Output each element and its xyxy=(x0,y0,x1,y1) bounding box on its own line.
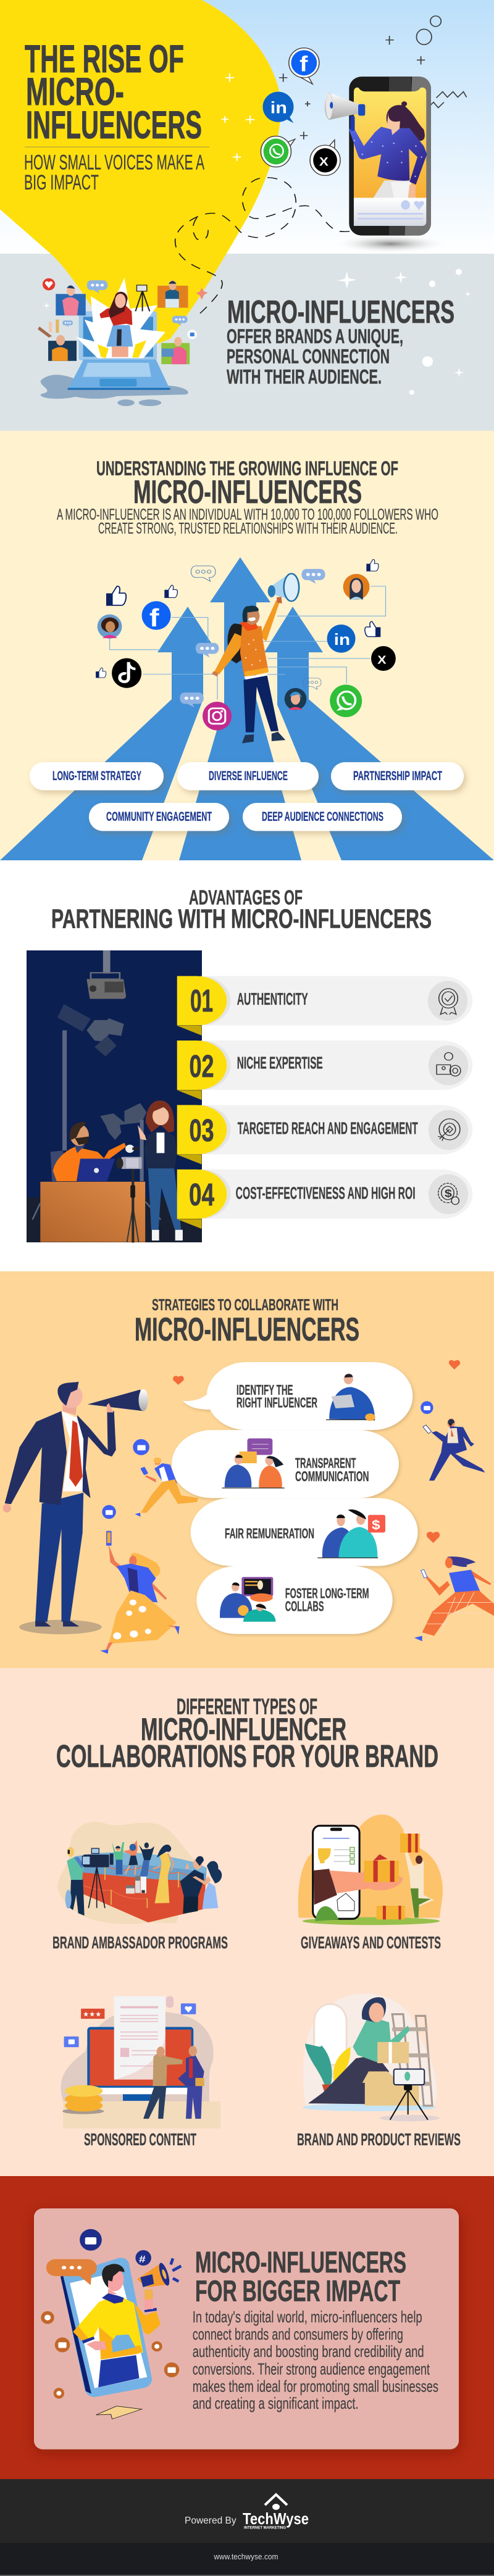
illustration: two people with payment xyxy=(317,1510,385,1558)
heading: micro-influencers offer: PERSONAL CONNECTION xyxy=(227,345,390,367)
icon: x bubble: X xyxy=(319,156,329,168)
illustration: influencer in phone: # xyxy=(139,2254,146,2265)
icon: x bubble xyxy=(310,140,340,175)
icon: expert xyxy=(437,1052,461,1076)
text: conclusion paragraph xyxy=(193,2308,438,2412)
pill: long-term strategy xyxy=(30,762,164,790)
panel: collaboration types xyxy=(0,1668,494,2176)
illustration: two people talking xyxy=(222,1439,285,1489)
icon: x: X xyxy=(377,654,387,667)
text: powered by: Powered By xyxy=(185,2516,237,2526)
pill: deep audience connections: DEEP AUDIENCE CONNECTIONS xyxy=(262,810,383,824)
icon: instagram xyxy=(203,702,232,730)
heading: bigger impact xyxy=(195,2246,406,2308)
pill: partnership impact xyxy=(331,762,464,790)
illustration: studio panel xyxy=(27,950,202,1242)
icon: phone with influencer xyxy=(324,77,447,253)
icon: facebook: f xyxy=(149,604,159,632)
heading: strategies: STRATEGIES TO COLLABORATE WITH xyxy=(152,1297,338,1314)
subtitle: BIG IMPACT xyxy=(24,171,99,194)
illustration: running man right xyxy=(423,1419,485,1481)
step numbers: 01 xyxy=(190,983,213,1018)
illustration: running man center xyxy=(135,1457,198,1517)
heading: advantages: ADVANTAGES OF xyxy=(189,886,303,908)
step 03 shape xyxy=(177,1105,472,1165)
pills xyxy=(30,762,464,831)
step labels: NICHE EXPERTISE xyxy=(237,1053,323,1073)
title: MICRO- xyxy=(26,70,124,114)
text: conclusion paragraph: connect brands and consumers by offering xyxy=(193,2325,403,2343)
arrows xyxy=(0,557,494,860)
step numbers: 04 xyxy=(189,1177,214,1212)
pill: partnership impact: PARTNERSHIP IMPACT xyxy=(353,769,442,783)
illustration: giveaway xyxy=(298,1814,443,1925)
steps: $ xyxy=(445,1188,452,1200)
text: bubble labels: TRANSPARENT xyxy=(295,1455,356,1471)
pill: deep audience connections xyxy=(243,803,402,831)
icon: thumbs up xyxy=(96,560,380,678)
icon: white stars and dots xyxy=(43,269,471,395)
dashed path xyxy=(175,178,367,315)
step numbers xyxy=(189,983,214,1212)
heading: understanding xyxy=(96,457,398,510)
icon: x xyxy=(371,646,396,671)
step labels xyxy=(236,989,418,1202)
logo: techwyse: INTERNET MARKETING xyxy=(244,2527,286,2530)
logo: techwyse xyxy=(243,2495,309,2530)
illustration: influencer laptop xyxy=(38,278,208,406)
text: definition xyxy=(57,507,438,538)
icon: facebook xyxy=(142,601,171,632)
illustration: two people with payment: $ xyxy=(372,1518,380,1532)
icon: whatsapp xyxy=(330,684,362,717)
illustration: man with megaphone xyxy=(3,1382,148,1634)
heading: strategies: MICRO-INFLUENCERS xyxy=(135,1311,359,1348)
icon: target xyxy=(438,1119,460,1141)
subtitle xyxy=(24,151,204,194)
heading: collaboration types: MICRO-INFLUENCER xyxy=(141,1712,346,1747)
heading: micro-influencers offer: OFFER BRANDS A UNIQUE, xyxy=(227,325,403,347)
text: conclusion paragraph: and creating a significant impact. xyxy=(193,2394,359,2412)
text: bubble labels: COLLABS xyxy=(285,1598,324,1614)
illustration: tablet person xyxy=(326,1374,375,1421)
panel: strategies xyxy=(0,1271,494,1668)
step numbers: 03 xyxy=(189,1113,214,1148)
text: bubble labels: RIGHT INFLUENCER xyxy=(237,1395,317,1411)
pill: community engagement: COMMUNITY ENGAGEMENT xyxy=(106,810,212,824)
step labels: AUTHENTICITY xyxy=(237,989,308,1008)
heading: advantages xyxy=(51,886,432,934)
illustration: red carpet xyxy=(57,1822,222,1924)
connector lines xyxy=(110,586,385,700)
illustration: sponsored content: ★★★ xyxy=(83,2011,101,2018)
text: collaboration labels: SPONSORED CONTENT xyxy=(84,2130,196,2149)
icon: linkedin bubble: in xyxy=(270,99,287,117)
icon: award xyxy=(439,989,458,1015)
title xyxy=(25,38,202,147)
pill: long-term strategy: LONG-TERM STRATEGY xyxy=(52,769,141,783)
icon: cost gear xyxy=(438,1183,459,1205)
illustration: influencer in phone xyxy=(41,2229,181,2419)
icon: linkedin: in xyxy=(334,631,350,649)
icon: tiktok xyxy=(112,658,141,688)
heading: micro-influencers offer: WITH THEIR AUDIENCE. xyxy=(227,365,382,388)
panel: advantages xyxy=(0,860,494,1271)
icon: hearts and likes xyxy=(102,1360,460,1543)
illustration: running woman xyxy=(100,1531,180,1654)
icon: avatars xyxy=(98,574,369,710)
step 04 shape xyxy=(177,1170,472,1229)
panel: bigger impact xyxy=(0,2176,494,2479)
icon: dark decorative marks xyxy=(279,16,467,139)
text: website: www.techwyse.com xyxy=(213,2552,278,2561)
text: bubble labels: IDENTIFY THE xyxy=(237,1382,293,1398)
panel: understanding xyxy=(0,431,494,860)
icon: facebook bubble: f xyxy=(299,52,308,76)
heading: understanding: MICRO-INFLUENCERS xyxy=(133,474,362,510)
step numbers: 02 xyxy=(189,1049,214,1084)
subtitle: HOW SMALL VOICES MAKE A xyxy=(24,151,204,174)
title: THE RISE OF xyxy=(25,38,184,81)
icon: linkedin bubble xyxy=(263,92,294,123)
icon: linkedin xyxy=(327,625,356,653)
icon: facebook bubble xyxy=(289,48,319,84)
icon: white sparkles xyxy=(222,73,254,161)
pill: diverse influence: DIVERSE INFLUENCE xyxy=(209,769,288,783)
footer xyxy=(0,2479,494,2576)
card xyxy=(34,2208,459,2449)
pill: community engagement xyxy=(89,803,229,831)
illustration: man with megaphone xyxy=(212,573,299,743)
icon: whatsapp bubble xyxy=(261,136,295,167)
step 02 shape xyxy=(177,1041,472,1100)
text: bubble labels: FAIR REMUNERATION xyxy=(225,1525,314,1541)
heading: collaboration types xyxy=(56,1693,438,1774)
heading: collaboration types: DIFFERENT TYPES OF xyxy=(177,1693,317,1719)
logo: techwyse: TechWyse xyxy=(243,2509,309,2528)
illustration: sponsored content xyxy=(61,1996,220,2129)
illustration: running woman right xyxy=(414,1556,494,1641)
heading: micro-influencers offer xyxy=(227,294,454,388)
heading: strategies xyxy=(135,1297,359,1348)
step 01 shape xyxy=(177,976,472,1036)
panel: hero xyxy=(0,0,494,431)
text: bubble labels: COMMUNICATION xyxy=(295,1468,369,1484)
text: collaboration labels xyxy=(52,1933,461,2149)
text: bubble labels: FOSTER LONG-TERM xyxy=(285,1585,369,1601)
title: INFLUENCERS xyxy=(26,104,202,147)
pill: diverse influence xyxy=(177,762,319,790)
yellow blob xyxy=(0,0,281,358)
speech bubbles xyxy=(172,1362,418,1634)
text: collaboration labels: BRAND AMBASSADOR PROGRAMS xyxy=(52,1933,228,1952)
icon: chat bubbles xyxy=(180,566,325,708)
text: bubble labels xyxy=(225,1382,369,1614)
illustration: presentation xyxy=(220,1577,275,1622)
illustration: product review xyxy=(303,1994,440,2121)
steps xyxy=(177,976,472,1229)
